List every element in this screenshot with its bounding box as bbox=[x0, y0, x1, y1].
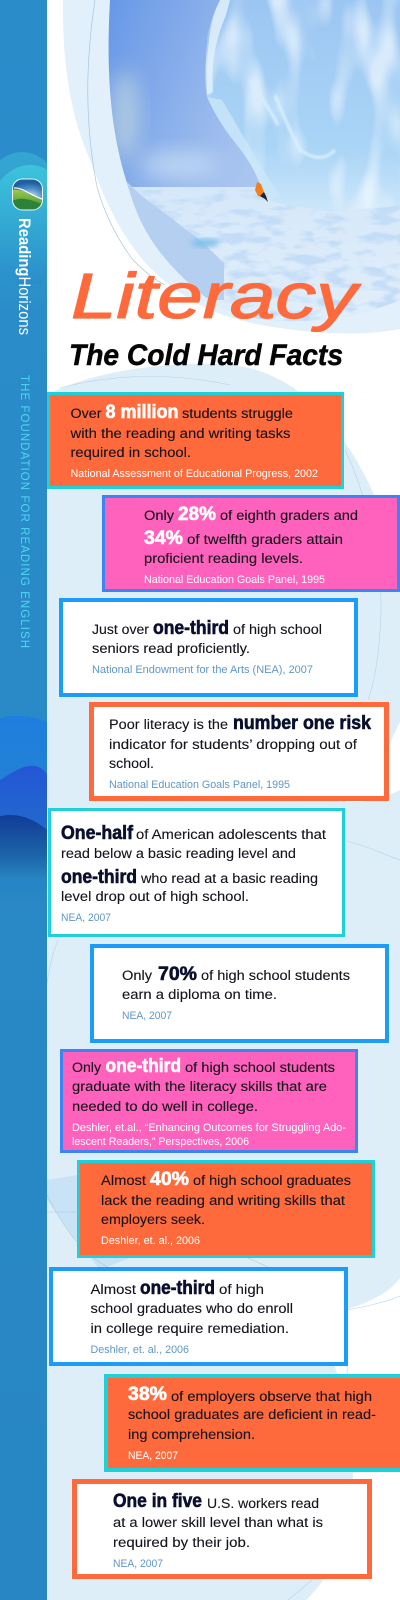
source: Deshler, et.al., “Enhancing Outcomes for Struggling Ado- bbox=[72, 1122, 346, 1134]
statement bbox=[122, 964, 350, 1002]
statement: of employers observe that high bbox=[171, 1389, 372, 1404]
statement: 38% bbox=[128, 1384, 167, 1405]
statement: school. bbox=[109, 756, 154, 771]
source: Deshler, et. al., 2006 bbox=[90, 1344, 189, 1356]
statement: of high school students bbox=[185, 1060, 335, 1075]
statement: number one risk bbox=[233, 713, 371, 734]
title: Literacy bbox=[71, 260, 362, 332]
icon: climber bbox=[255, 182, 268, 202]
statement: required in school. bbox=[70, 445, 191, 460]
source bbox=[72, 1122, 346, 1148]
icon: Reading Horizons logo bbox=[12, 178, 44, 212]
source: National Endowment for the Arts (NEA), 2007 bbox=[92, 664, 313, 676]
statement: Just over bbox=[92, 622, 150, 637]
panel: 38 percent bbox=[106, 1376, 400, 1470]
statement: Only bbox=[144, 508, 174, 523]
statement: 70% bbox=[158, 964, 197, 985]
statement: graduate with the literacy skills that are bbox=[72, 1079, 327, 1094]
source: National Education Goals Panel, 1995 bbox=[109, 779, 290, 791]
panel: almost one-third remediation bbox=[51, 1269, 346, 1364]
statement: of eighth graders and bbox=[220, 508, 358, 523]
statement: employers seek. bbox=[101, 1212, 205, 1227]
statement: Poor literacy is the bbox=[109, 717, 228, 732]
statement bbox=[92, 618, 322, 656]
statement: who read at a basic reading bbox=[140, 871, 318, 886]
panel: almost 40 percent bbox=[78, 1162, 374, 1256]
statement: 34% bbox=[144, 528, 183, 549]
statement: U.S. workers read bbox=[207, 1496, 319, 1511]
source: NEA, 2007 bbox=[122, 1010, 172, 1022]
tagline: THE FOUNDATION FOR READING ENGLISH bbox=[18, 375, 30, 648]
left sidebar bbox=[0, 0, 47, 1600]
statement bbox=[109, 713, 371, 771]
panel: just over one-third bbox=[61, 600, 356, 695]
panel: one in five bbox=[74, 1482, 370, 1576]
source: NEA, 2007 bbox=[128, 1450, 178, 1462]
statement: of high bbox=[219, 1282, 264, 1297]
statement bbox=[72, 1056, 335, 1114]
statement: one-third bbox=[140, 1278, 215, 1299]
statement bbox=[69, 402, 293, 460]
statement: of high school graduates bbox=[193, 1173, 351, 1188]
statement: students struggle bbox=[182, 406, 293, 421]
statement bbox=[128, 1384, 376, 1442]
statement: Only bbox=[72, 1060, 101, 1075]
panel: 8 million bbox=[48, 394, 342, 488]
source: National Education Goals Panel, 1995 bbox=[144, 574, 325, 586]
statement: ing comprehension. bbox=[128, 1427, 255, 1442]
statement: Over bbox=[70, 406, 102, 421]
statement: one-third bbox=[106, 1056, 181, 1077]
source: National Assessment of Educational Progress, 2002 bbox=[70, 468, 318, 480]
statement: level drop out of high school. bbox=[61, 889, 249, 904]
photo: ice cliff and climber bbox=[100, 0, 400, 340]
statement: One in five bbox=[113, 1491, 202, 1512]
statement: needed to do well in college. bbox=[72, 1099, 258, 1114]
statement: at a lower skill level than what is bbox=[113, 1515, 323, 1530]
statement: Almost bbox=[101, 1173, 146, 1188]
source: NEA, 2007 bbox=[61, 912, 111, 924]
statement: Only bbox=[122, 968, 152, 983]
statement: One-half bbox=[61, 823, 134, 844]
statement: lack the reading and writing skills that bbox=[101, 1193, 345, 1208]
statement: school graduates are deficient in read- bbox=[128, 1407, 376, 1422]
statement: earn a diploma on time. bbox=[122, 987, 277, 1002]
statement bbox=[101, 1169, 351, 1227]
brand name: ReadingHorizons bbox=[15, 218, 34, 335]
statement: of high school students bbox=[201, 968, 350, 983]
pale blue background swirl bbox=[47, 364, 400, 1600]
statement bbox=[61, 823, 326, 904]
statement: seniors read proficiently. bbox=[92, 641, 250, 656]
statement: indicator for students’ dropping out of bbox=[109, 737, 357, 752]
statement: required by their job. bbox=[113, 1535, 250, 1550]
panel: one-half bbox=[50, 810, 344, 936]
statement bbox=[113, 1491, 323, 1550]
statement: proficient reading levels. bbox=[144, 551, 303, 566]
panel: number one risk bbox=[92, 704, 386, 798]
panel: only one-third graduate bbox=[62, 1050, 356, 1152]
panel: 70 percent bbox=[92, 946, 387, 1041]
header photo band bbox=[63, 0, 400, 333]
statement: read below a basic reading level and bbox=[61, 846, 296, 861]
statement: one-third bbox=[153, 618, 229, 639]
statement: of twelfth graders attain bbox=[187, 532, 343, 547]
statement: with the reading and writing tasks bbox=[69, 426, 291, 441]
source: Deshler, et. al., 2006 bbox=[101, 1235, 200, 1247]
source: lescent Readers,” Perspectives, 2006 bbox=[72, 1136, 249, 1148]
statement: 40% bbox=[150, 1169, 189, 1190]
panel: 28 percent bbox=[104, 496, 398, 590]
statement: in college require remediation. bbox=[90, 1321, 289, 1336]
statement bbox=[90, 1278, 293, 1336]
source: NEA, 2007 bbox=[113, 1558, 163, 1570]
statement: school graduates who do enroll bbox=[90, 1301, 293, 1316]
statement: Almost bbox=[90, 1282, 136, 1297]
statement: of American adolescents that bbox=[136, 827, 326, 842]
statement: one-third bbox=[61, 867, 137, 888]
statement: 28% bbox=[178, 504, 216, 525]
statement bbox=[144, 504, 358, 566]
statement: of high school bbox=[233, 622, 322, 637]
subtitle: The Cold Hard Facts bbox=[69, 339, 343, 372]
statement: 8 million bbox=[106, 402, 178, 423]
